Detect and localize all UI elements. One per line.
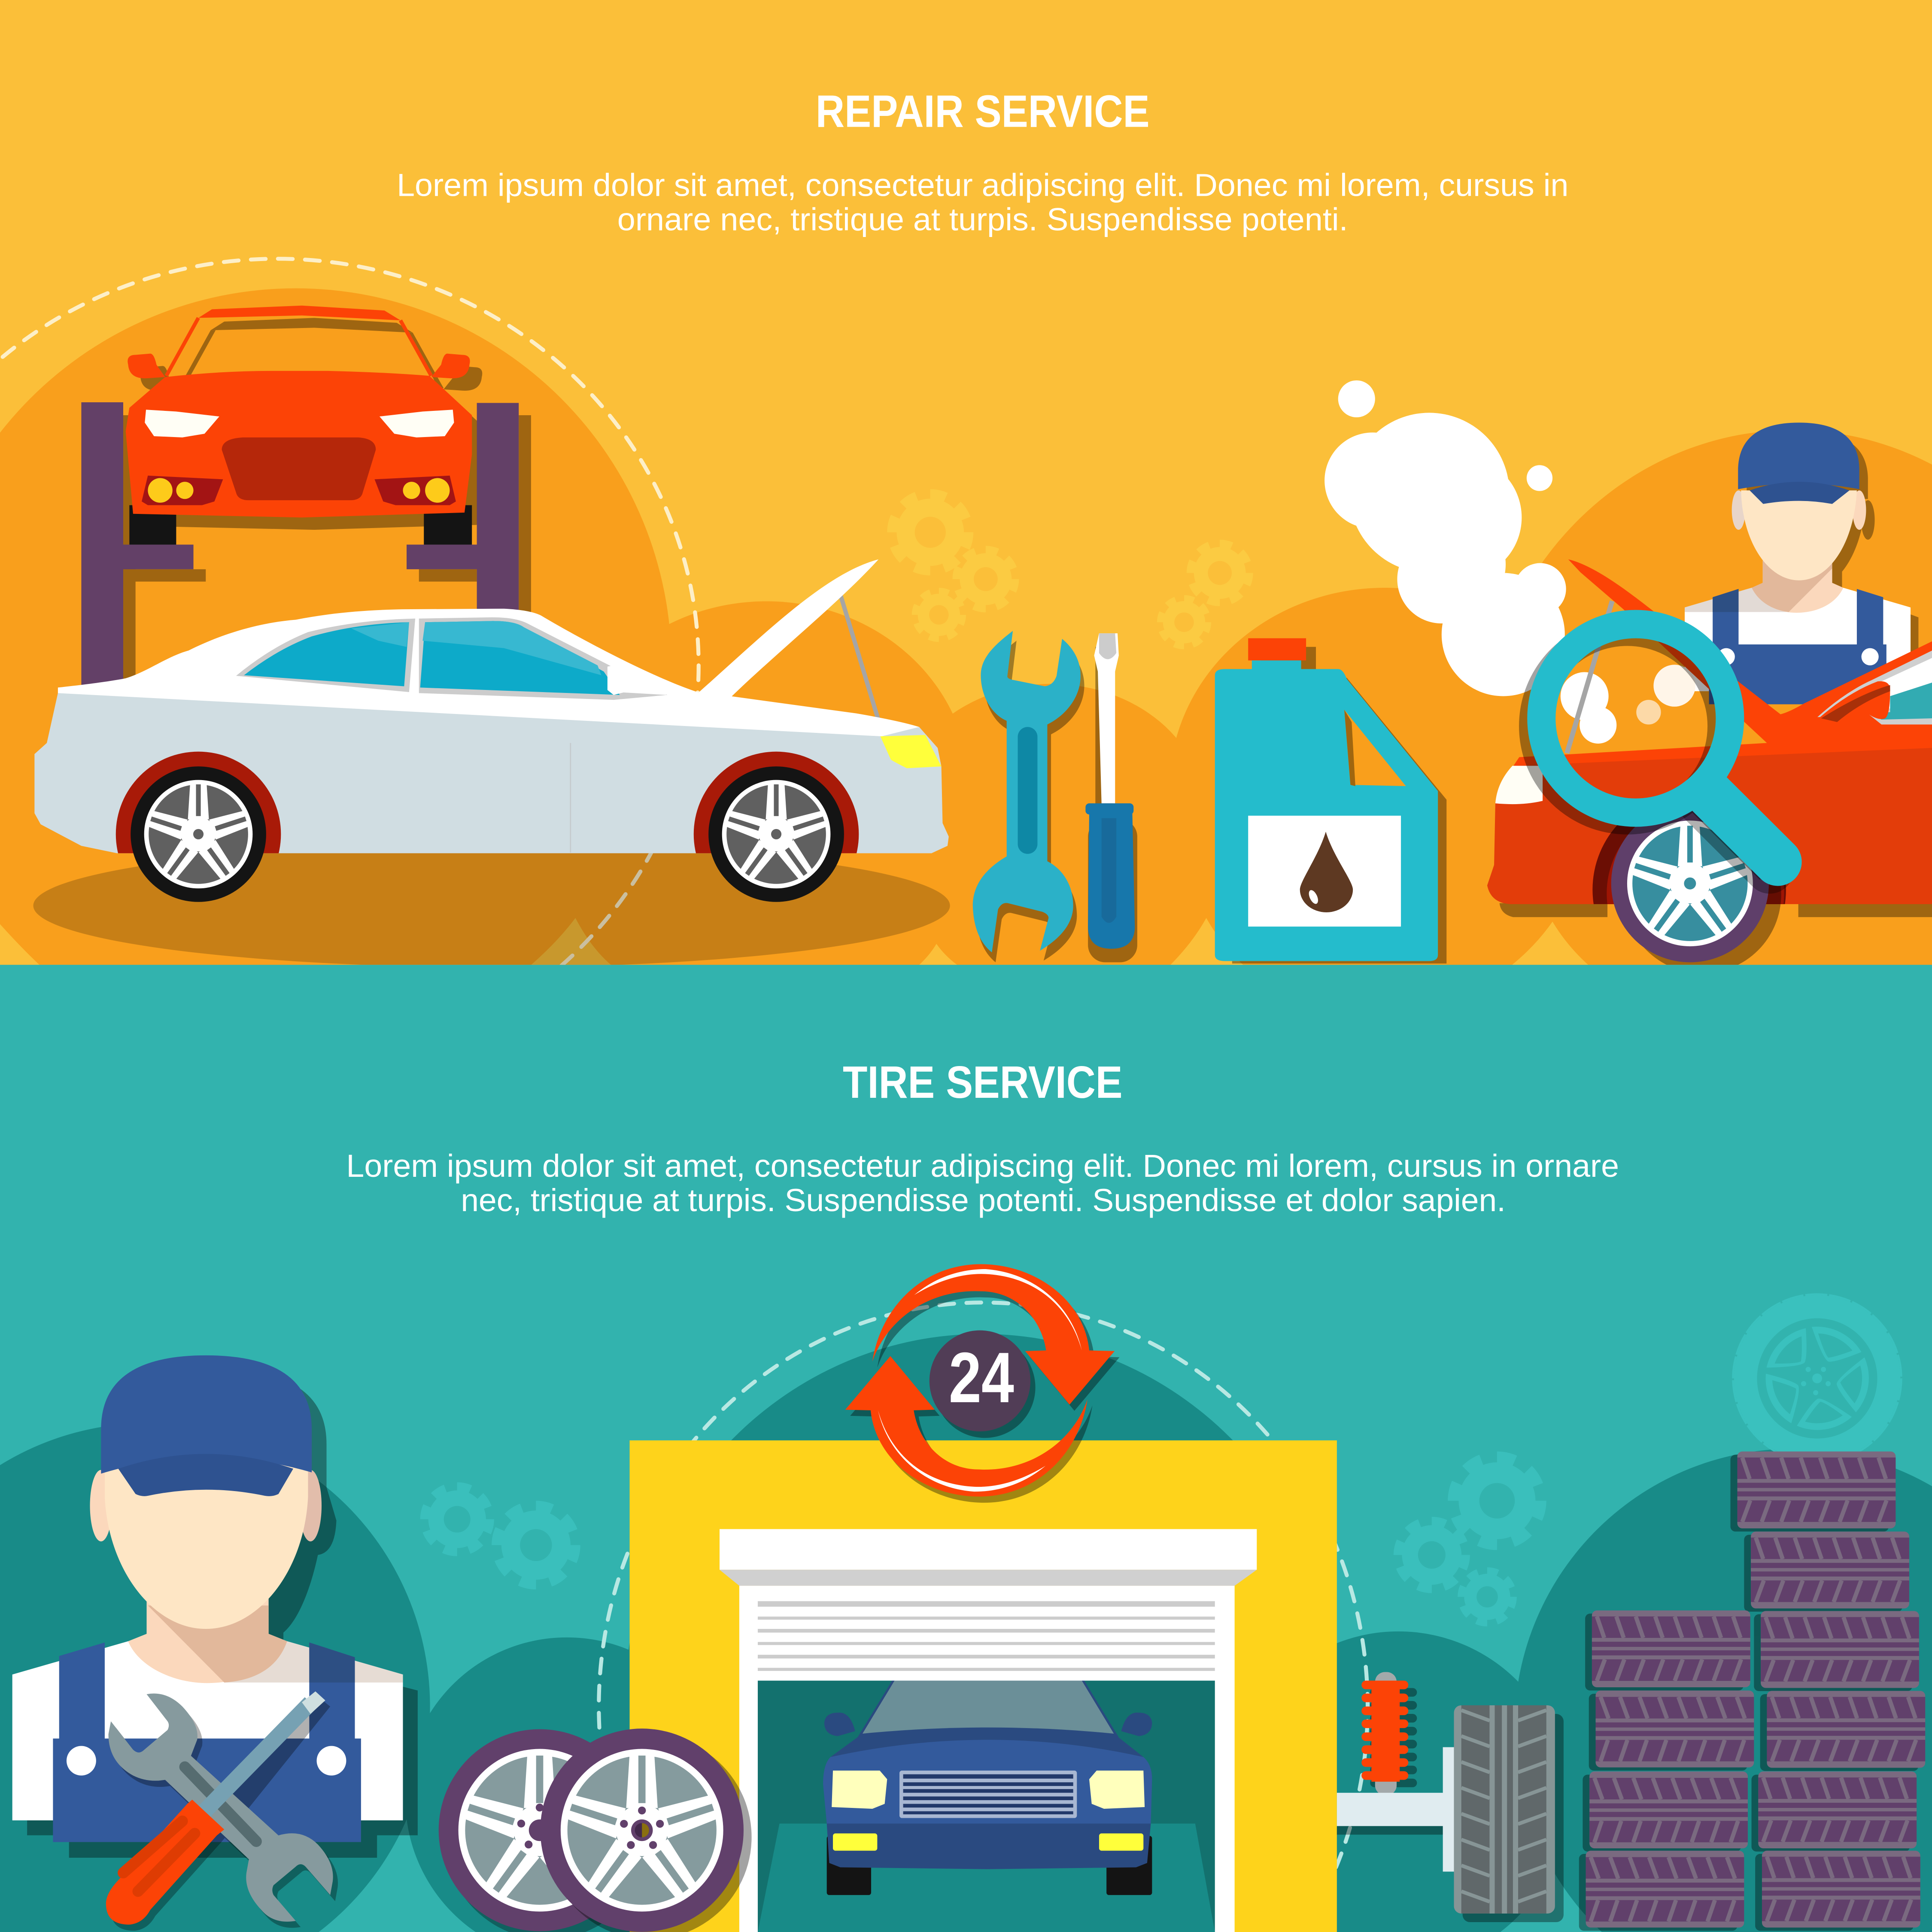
icon: tire front view xyxy=(1454,1705,1564,1922)
garage xyxy=(630,1440,1337,1932)
grille xyxy=(899,1771,1077,1818)
car mirror xyxy=(1819,681,1890,725)
side mirror xyxy=(608,664,667,695)
icon: crossed wrench and screwdriver xyxy=(106,1692,338,1931)
yellow wall xyxy=(630,1440,1337,1932)
panel: repair service background xyxy=(0,0,1932,965)
mirrors xyxy=(128,354,470,378)
tires xyxy=(827,1836,871,1895)
windshield glass xyxy=(1871,683,1932,720)
text block: tire service description: Lorem ipsum dolor sit amet, consectetur adipiscing elit. Donec mi lorem, cursus in ornare xyxy=(346,1148,1619,1184)
gears: repair panel xyxy=(893,495,1249,646)
cap xyxy=(101,1355,312,1473)
icon: magnifying glass xyxy=(1533,624,1778,870)
grille xyxy=(222,437,376,500)
lift and car shadow xyxy=(123,318,531,694)
mechanic shadow xyxy=(27,1370,418,1858)
oil drop xyxy=(1300,832,1353,912)
label xyxy=(1248,816,1401,927)
reflections in lens xyxy=(1561,665,1695,744)
gears: tire panel xyxy=(425,1458,1540,1622)
number: 24 xyxy=(949,1338,1014,1418)
icon: screwdriver xyxy=(1085,633,1137,962)
door line xyxy=(570,743,571,853)
shirt xyxy=(12,1641,403,1820)
hood strut xyxy=(1567,601,1612,753)
axle xyxy=(1337,1747,1454,1871)
title: repair service: REPAIR SERVICE xyxy=(816,86,1150,137)
hub and bolts xyxy=(620,1807,664,1849)
shirt xyxy=(1685,588,1911,691)
arrow shadows xyxy=(850,1270,1120,1503)
ears xyxy=(90,1470,112,1541)
hood xyxy=(830,1728,1143,1757)
back wheel shadow xyxy=(445,1735,649,1932)
bumper xyxy=(827,1823,1151,1869)
hills: tire panel xyxy=(0,1334,1932,1932)
mechanic: repair panel xyxy=(1685,422,1918,704)
lower body xyxy=(34,693,949,853)
lens background xyxy=(1555,638,1716,799)
stack shadows xyxy=(1579,1455,1918,1931)
text block: repair service description: Lorem ipsum dolor sit amet, consectetur adipiscing elit. Donec mi lorem, cursus in xyxy=(397,167,1568,203)
smoke xyxy=(1324,380,1566,696)
fog lights xyxy=(833,1833,877,1851)
wheel arches xyxy=(116,751,859,854)
mechanic: tire panel xyxy=(12,1355,418,1858)
badge: 24 hour service with arrows xyxy=(845,1264,1120,1503)
ears xyxy=(1732,490,1745,530)
car body xyxy=(126,371,472,517)
headlights xyxy=(832,1771,1145,1809)
wheel shadow xyxy=(1623,816,1781,973)
hood xyxy=(699,559,878,697)
stacked tires xyxy=(1579,1452,1925,1931)
handle hole xyxy=(1344,710,1406,786)
arrow: clockwise top xyxy=(872,1264,1115,1405)
opening xyxy=(758,1681,1215,1932)
white car with open hood xyxy=(34,559,949,917)
windshield glare xyxy=(1836,658,1932,708)
headlight xyxy=(1495,766,1543,804)
overalls xyxy=(1709,589,1886,704)
wheel xyxy=(1611,805,1769,962)
arrow: clockwise bottom xyxy=(845,1356,1088,1497)
text block: repair service description: ornare nec, tristique at turpis. Suspendisse potenti. xyxy=(617,201,1348,237)
overalls xyxy=(53,1643,361,1842)
screwdriver handle xyxy=(106,1800,224,1925)
hills: repair panel xyxy=(0,289,1932,965)
awning xyxy=(720,1529,1257,1570)
wheels xyxy=(131,766,266,902)
icon: wrench xyxy=(973,631,1084,962)
back wheel xyxy=(439,1729,641,1931)
title: tire service: TIRE SERVICE xyxy=(843,1057,1122,1108)
icon: suspension spring xyxy=(1361,1672,1417,1795)
car shadow xyxy=(1500,903,1932,917)
dashed circle: repair panel xyxy=(1,257,701,965)
neck and collar xyxy=(1752,561,1843,613)
upper body xyxy=(58,609,932,745)
red car on lift xyxy=(81,306,531,694)
text block: tire service description xyxy=(346,1148,1619,1218)
lift posts xyxy=(81,402,519,687)
front wheel xyxy=(540,1728,744,1932)
headlights xyxy=(145,410,454,437)
car roof and pillars xyxy=(198,306,401,320)
under-car wheels xyxy=(129,505,472,544)
lower body xyxy=(1487,748,1932,904)
windshield frame xyxy=(1817,650,1932,725)
icon: oil jug xyxy=(1215,638,1446,963)
dashed circle: tire panel xyxy=(599,1303,1368,1932)
ghost wheel xyxy=(1733,1294,1902,1463)
red car under repair xyxy=(1487,559,1932,986)
front window xyxy=(419,617,667,700)
cap xyxy=(1738,422,1859,489)
ground shadow under white car xyxy=(33,844,950,967)
fog lights xyxy=(142,476,456,505)
face xyxy=(105,1458,308,1629)
panel: tire service background xyxy=(0,965,1932,1932)
hood and upper body xyxy=(1513,559,1932,766)
wheel arch xyxy=(1592,793,1786,986)
body xyxy=(823,1740,1152,1823)
clock disc xyxy=(930,1331,1030,1431)
text block: repair service description xyxy=(397,167,1568,237)
windshield xyxy=(857,1681,1119,1738)
screwdriver blade xyxy=(204,1703,310,1811)
shutter slats xyxy=(758,1601,1215,1671)
face xyxy=(1741,490,1857,580)
front wheel shadow xyxy=(547,1735,752,1932)
mirrors xyxy=(824,1713,1152,1736)
neck and collar xyxy=(128,1596,287,1683)
rear window xyxy=(236,619,415,692)
blue car in garage xyxy=(823,1681,1152,1895)
door frame xyxy=(739,1586,1235,1932)
text block: tire service description: nec, tristique at turpis. Suspendisse potenti. Suspendisse et dolor sapien. xyxy=(461,1182,1506,1218)
alloy wheels xyxy=(439,1728,752,1932)
headlight xyxy=(881,735,942,768)
hood strut xyxy=(840,594,880,725)
